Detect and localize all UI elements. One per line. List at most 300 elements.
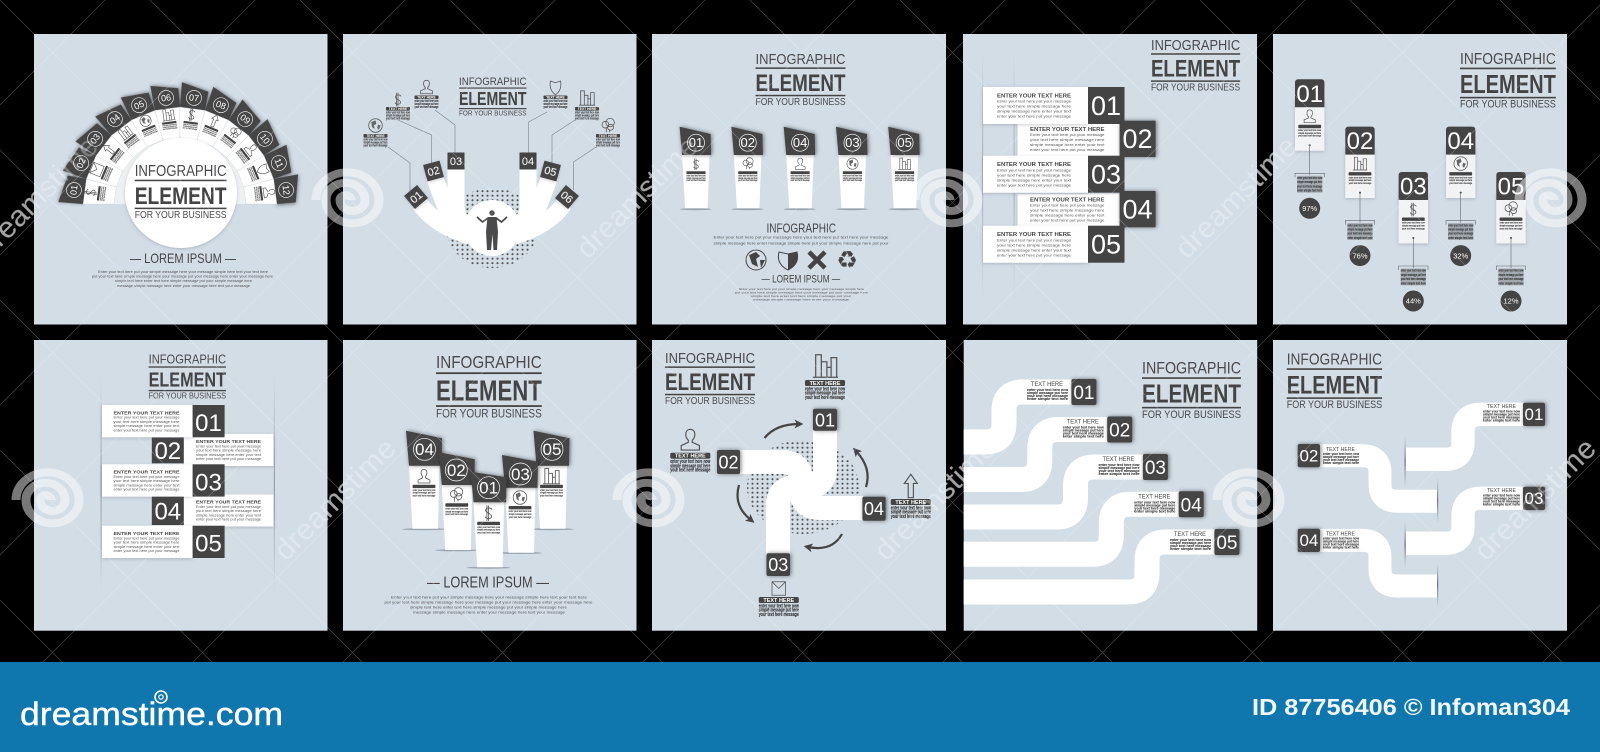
number box 03: 03 bbox=[450, 156, 462, 168]
fan segment 02: 02 bbox=[75, 157, 88, 170]
fan segment 07: your text here message bbox=[183, 126, 197, 131]
tab 04: 04 bbox=[154, 498, 181, 526]
tab 05: your text here simple message here bbox=[997, 242, 1072, 247]
cycle arrow top bbox=[764, 424, 799, 438]
icon block: tree: TEXT HERE bbox=[599, 134, 618, 138]
title bbox=[149, 351, 226, 401]
card 04: 32% bbox=[1453, 251, 1469, 260]
watermark text on the black ground: dreamstime bbox=[1169, 130, 1304, 265]
fan segment 03 bbox=[75, 120, 136, 175]
number box 03 bbox=[448, 152, 464, 170]
pillar 01: enter your text here now bbox=[477, 525, 500, 529]
title: INFOGRAPHIC bbox=[459, 76, 526, 88]
title: ELEMENT bbox=[756, 70, 846, 97]
ribbons bbox=[964, 376, 1244, 604]
title: FOR YOUR BUSINESS bbox=[1287, 399, 1382, 411]
block: chart: your text here message bbox=[805, 395, 845, 401]
pillar 01: your text here message bbox=[686, 178, 706, 182]
fan segment 05: your text here message bbox=[144, 130, 158, 138]
watermark text: dreamstime bbox=[868, 432, 1003, 567]
block: envelope: TEXT HERE bbox=[763, 598, 795, 604]
tab 01: enter your text here put your message bbox=[997, 114, 1072, 119]
tab 03: ENTER YOUR TEXT HERE bbox=[114, 470, 180, 476]
businessman bbox=[477, 210, 507, 250]
fan segment 01 bbox=[58, 175, 117, 209]
card 02: enter simple text here bbox=[1347, 236, 1373, 240]
icon block: shield: simple message put here bbox=[544, 102, 568, 106]
card 03: your text here message bbox=[1401, 277, 1426, 281]
tab 01: 01 bbox=[195, 410, 222, 437]
tab 05 bbox=[102, 526, 225, 558]
title: FOR YOUR BUSINESS bbox=[459, 109, 526, 118]
tab 03: enter your text here put your message bbox=[114, 487, 180, 492]
pillar 02 bbox=[435, 452, 479, 551]
card 02: simple message put here bbox=[1349, 178, 1372, 182]
fan segment 08: simple message put here bbox=[203, 128, 217, 136]
fan segment 10: simple message put here bbox=[236, 150, 247, 163]
ribbon 05: your text here message bbox=[1170, 544, 1211, 548]
card 01: enter your text here now bbox=[1297, 176, 1323, 180]
title: INFOGRAPHIC bbox=[149, 351, 226, 366]
fan segment 08: 08 bbox=[214, 99, 227, 112]
pillar 02 bbox=[731, 127, 763, 210]
ribbon 02: enter simple text here bbox=[1323, 461, 1359, 465]
pillar 04 bbox=[784, 127, 816, 210]
icon block: tree bbox=[596, 118, 620, 148]
title: FOR YOUR BUSINESS bbox=[1142, 409, 1241, 421]
ribbon 03: your text here message bbox=[1483, 500, 1520, 504]
pillar 02: your text here message bbox=[445, 512, 468, 516]
fan segment 05: 05 bbox=[133, 99, 146, 112]
body text: message simple message here enter your message here text your message bbox=[117, 283, 251, 288]
tab 04: enter your text here put your message bbox=[196, 517, 262, 522]
block: person: enter your text here now bbox=[670, 459, 711, 465]
tab 04: simple message here enter your text bbox=[196, 512, 262, 517]
body text bbox=[384, 594, 593, 614]
tab 05: your text here simple message here bbox=[114, 540, 180, 545]
fan segment 09: your text here message bbox=[220, 138, 233, 149]
ribbon 04: simple message put here bbox=[1323, 540, 1359, 544]
icon block: dollar bbox=[386, 93, 410, 120]
pillar 02: simple message put here bbox=[738, 176, 758, 180]
tab 02: Enter your text here put your message bbox=[1030, 132, 1105, 137]
card 01: your text here message bbox=[1298, 134, 1321, 138]
subheading: — LOREM IPSUM — bbox=[762, 274, 840, 286]
fan segment 01: simple message put here bbox=[100, 187, 105, 201]
panel 9: stepped ribbons bbox=[964, 340, 1258, 631]
block: person: your text here message bbox=[670, 468, 710, 474]
ribbon 04 bbox=[964, 488, 1208, 567]
icon block: person: your text here message bbox=[414, 105, 439, 109]
fan segment 06: simple message put here bbox=[163, 124, 177, 129]
pillar 03: 03 bbox=[845, 135, 860, 150]
block: arrow: TEXT HERE bbox=[895, 500, 927, 506]
ribbon 02: enter your text here now bbox=[1063, 426, 1104, 430]
ribbon 02: your text here message bbox=[1063, 432, 1104, 436]
ribbon 05 bbox=[964, 526, 1244, 604]
body text: Enter your text here put your simple message here your message simple here text your text here bbox=[391, 594, 588, 600]
ribbon 01 bbox=[964, 376, 1100, 454]
ribbon 03: simple message put here bbox=[1483, 496, 1520, 500]
tab 01: simple message here enter your text bbox=[997, 109, 1072, 114]
fan segment 04: enter your text here now bbox=[125, 135, 138, 146]
fan segment 07: simple message put here bbox=[183, 124, 197, 129]
pillar 04: your text here message bbox=[413, 494, 436, 498]
card 02 bbox=[1345, 127, 1375, 266]
body text: Enter your text here put your simple message here your message simple here bbox=[739, 287, 865, 291]
card 02: 02 bbox=[1347, 128, 1373, 155]
card 03: simple message put here bbox=[1402, 224, 1425, 228]
fan segment 10 bbox=[223, 119, 284, 175]
fan segment 05: simple message put here bbox=[143, 128, 157, 136]
tab 03: Enter your text here put your message bbox=[114, 474, 180, 479]
ribbon 02: TEXT HERE bbox=[1067, 420, 1099, 426]
icon block: shield: your text here message bbox=[544, 105, 568, 109]
title: INFOGRAPHIC bbox=[1287, 352, 1382, 369]
ribbon 02 bbox=[1298, 444, 1437, 501]
ribbon 03: TEXT HERE bbox=[1102, 457, 1134, 463]
pillar 01: simple message put here bbox=[477, 528, 500, 532]
tab 03: your text here simple message here bbox=[114, 478, 180, 483]
tab 05: enter your text here put your message bbox=[114, 548, 180, 553]
card 05: enter simple text here bbox=[1498, 281, 1524, 285]
panel 7: staggered pillars bbox=[343, 340, 636, 631]
pillar 05 bbox=[530, 431, 574, 530]
footer id and credit: ID 87756406 © Infoman304 bbox=[1252, 694, 1570, 720]
footer logo: dreamstime.com bbox=[20, 696, 283, 732]
fan segment 03: enter your text here now bbox=[111, 149, 123, 162]
tab 05: Enter your text here put your message bbox=[114, 535, 180, 540]
subheading: — LOREM IPSUM — bbox=[130, 250, 236, 266]
pillar 02: enter your text here now bbox=[445, 506, 469, 510]
title: ELEMENT bbox=[665, 369, 755, 396]
ribbon 01: your text here message bbox=[1483, 416, 1520, 420]
title: FOR YOUR BUSINESS bbox=[1151, 82, 1240, 93]
pillar 04: 04 bbox=[415, 440, 434, 459]
white centre oval bbox=[464, 200, 520, 256]
tab 05: 05 bbox=[1091, 230, 1121, 260]
fan segment 02: simple message put here bbox=[104, 167, 112, 181]
block: envelope bbox=[759, 582, 799, 618]
fan segment 03: 03 bbox=[88, 132, 102, 146]
title bbox=[1460, 51, 1556, 111]
panel 2: hand fingers with businessman bbox=[343, 34, 636, 324]
ribbon 04: 04 bbox=[1181, 495, 1202, 516]
tab 03: ENTER YOUR TEXT HERE bbox=[997, 162, 1071, 168]
ribbon 01: enter your text here now bbox=[1027, 388, 1069, 392]
title bbox=[756, 51, 846, 108]
pillar 03: enter your text here now bbox=[509, 509, 532, 513]
halftone dots bbox=[747, 440, 859, 534]
card 05: 12% bbox=[1503, 297, 1519, 306]
fan segment 12 bbox=[243, 174, 302, 209]
icon block: dollar: your text here message bbox=[386, 116, 410, 120]
title: ELEMENT bbox=[135, 183, 227, 210]
title: INFOGRAPHIC bbox=[1151, 38, 1240, 54]
icon block: chart: enter your text here now bbox=[575, 110, 599, 114]
icon block: shield: TEXT HERE bbox=[546, 95, 566, 99]
card 05: enter your text here now bbox=[1498, 269, 1524, 273]
tab 01: your text here simple message here bbox=[114, 419, 180, 424]
number box 01: 01 bbox=[408, 189, 425, 206]
pillar 04: enter your text here now bbox=[791, 173, 810, 177]
tab 03: simple message here enter your text bbox=[114, 482, 180, 487]
ribbon 03: enter simple text here bbox=[1483, 502, 1520, 506]
title: FOR YOUR BUSINESS bbox=[756, 97, 846, 108]
tab 02: your text here simple message here bbox=[196, 448, 262, 453]
number box 06 bbox=[555, 185, 579, 209]
ribbon 01: TEXT HERE bbox=[1031, 382, 1063, 388]
tab 02: simple message here enter your text bbox=[1030, 142, 1106, 147]
ribbon 01: TEXT HERE bbox=[1487, 404, 1516, 410]
fan segment 04: simple message put here bbox=[126, 137, 139, 148]
ribbon 03: enter your text here now bbox=[1098, 463, 1140, 467]
tab 03: Enter your text here put your message bbox=[997, 167, 1072, 172]
block: envelope: simple message put here bbox=[759, 608, 799, 614]
number box 05: 05 bbox=[543, 165, 558, 179]
halftone dots bbox=[446, 188, 538, 268]
tab 05: simple message here enter your text bbox=[997, 247, 1072, 252]
card 03: your text here message bbox=[1402, 226, 1425, 230]
ribbon 04: your text here message bbox=[1323, 543, 1359, 547]
fan segment 09: 09 bbox=[238, 112, 252, 126]
block: arrow: simple message put here bbox=[891, 510, 931, 516]
fan segment 06: 06 bbox=[160, 92, 172, 104]
fan segment 04: your text here message bbox=[127, 138, 140, 149]
icon block: globe: TEXT HERE bbox=[366, 134, 386, 138]
ribbon 01: enter simple text here bbox=[1027, 397, 1068, 401]
watermark text: dreamstime bbox=[1169, 130, 1304, 265]
ribbon 01: simple message put here bbox=[1483, 412, 1520, 416]
pillar 01: your text here message bbox=[477, 531, 500, 535]
fan segment 03: your text here message bbox=[114, 151, 125, 164]
ribbon 04: your text here message bbox=[1134, 506, 1176, 510]
card 05: simple message put here bbox=[1498, 273, 1524, 277]
watermark text on the black ground: dreamstime bbox=[868, 432, 1003, 567]
pillar 05: enter your text here now bbox=[540, 488, 563, 492]
watermark text bbox=[0, 130, 1600, 567]
ribbon 04: enter simple text here bbox=[1323, 546, 1359, 550]
body text: simple text here enter text here simple message put your simple message here bbox=[115, 278, 253, 283]
fan segment 02 bbox=[63, 145, 125, 192]
fan segment 10: enter your text here now bbox=[238, 149, 249, 162]
card 01: simple message put here bbox=[1298, 131, 1321, 135]
tab 03: 03 bbox=[1091, 160, 1121, 190]
tab 01: ENTER YOUR TEXT HERE bbox=[114, 410, 180, 416]
block: chart bbox=[805, 355, 846, 401]
ribbon 03: 03 bbox=[1145, 458, 1166, 479]
ribbon 03 bbox=[964, 451, 1172, 530]
tab 02: 02 bbox=[154, 438, 181, 465]
fan segment 12: your text here message bbox=[253, 187, 258, 201]
fan segment 06: enter your text here now bbox=[162, 123, 177, 128]
pillar 03 bbox=[498, 455, 542, 554]
card 01: 97% bbox=[1302, 204, 1318, 213]
title: FOR YOUR BUSINESS bbox=[149, 391, 226, 401]
card 01: your text here message bbox=[1297, 184, 1322, 188]
ribbon 04: enter simple text here bbox=[1134, 509, 1176, 513]
card 02: enter your text here now bbox=[1349, 175, 1372, 179]
tab 01: ENTER YOUR TEXT HERE bbox=[997, 94, 1071, 100]
card 05: your text here message bbox=[1500, 226, 1523, 230]
fan segment 01: your text here message bbox=[102, 187, 107, 201]
card 04: enter your text here now bbox=[1449, 175, 1473, 179]
pillar 01 bbox=[467, 472, 511, 569]
ribbon 04: enter your text here now bbox=[1134, 500, 1176, 504]
watermark text: dreamstime bbox=[268, 432, 403, 567]
pillar 03: your text here message bbox=[509, 515, 532, 519]
ribbon 02: simple message put here bbox=[1323, 455, 1359, 459]
fan pale ring bbox=[114, 138, 246, 204]
box 03: 03 bbox=[768, 555, 788, 575]
fan segment 10: your text here message bbox=[235, 151, 246, 164]
card 03 bbox=[1399, 172, 1428, 312]
pillar 04: enter your text here now bbox=[413, 488, 436, 492]
panel 5: percentage cards bbox=[1273, 34, 1567, 324]
title bbox=[1287, 352, 1382, 411]
card 04: simple message put here bbox=[1448, 227, 1473, 231]
pinwheel arms bbox=[740, 430, 863, 555]
card 02: your text here message bbox=[1347, 232, 1373, 236]
tab 04: simple message here enter your text bbox=[1030, 212, 1106, 217]
ribbon 04: TEXT HERE bbox=[1138, 494, 1170, 500]
fan segment 01: 01 bbox=[68, 184, 80, 196]
title bbox=[665, 350, 755, 407]
pillar 01: 01 bbox=[689, 135, 703, 150]
pillar 05 bbox=[888, 127, 920, 210]
tab 05 bbox=[983, 226, 1124, 263]
block: person bbox=[670, 429, 711, 474]
ribbon 03: simple message put here bbox=[1098, 466, 1140, 470]
pillar 05: your text here message bbox=[540, 494, 563, 498]
icon block: globe bbox=[364, 119, 388, 148]
tab 02: simple message here enter your text bbox=[196, 452, 262, 457]
ribbon 02: TEXT HERE bbox=[1326, 447, 1355, 453]
pillar 05: 05 bbox=[543, 440, 561, 459]
tab 05: 05 bbox=[195, 531, 222, 558]
ribbon 01: simple message put here bbox=[1027, 391, 1068, 395]
watermark text on the black ground: dreamstime bbox=[1468, 432, 1600, 567]
card 03: simple message put here bbox=[1401, 273, 1426, 277]
ribbon 03: TEXT HERE bbox=[1487, 488, 1516, 494]
tab 02: ENTER YOUR TEXT HERE bbox=[196, 439, 262, 445]
lower text: simple message here enter message simple here put your simple message here put your bbox=[714, 240, 889, 246]
body text: message simple message here enter your message here text your message bbox=[413, 610, 566, 614]
panel 10: S-curved ribbons bbox=[1273, 340, 1567, 631]
number box 02: 02 bbox=[426, 165, 441, 179]
tab 05: ENTER YOUR TEXT HERE bbox=[114, 531, 180, 537]
ribbon 03: 03 bbox=[1525, 489, 1543, 508]
ribbon 02: enter simple text here bbox=[1063, 434, 1104, 438]
card 03: 03 bbox=[1400, 174, 1427, 200]
tab 02: 02 bbox=[1122, 124, 1153, 154]
tab 03: 03 bbox=[195, 469, 222, 496]
ribbon 02: your text here message bbox=[1323, 458, 1359, 462]
card 01: enter your text here now bbox=[1298, 128, 1322, 132]
tab 01: Enter your text here put your message bbox=[997, 99, 1072, 104]
title: FOR YOUR BUSINESS bbox=[665, 396, 755, 407]
fan segment 12: enter your text here now bbox=[256, 186, 261, 201]
tab 02: enter your text here put your message bbox=[196, 456, 262, 461]
block: chart: TEXT HERE bbox=[810, 381, 841, 387]
title: ELEMENT bbox=[1142, 379, 1241, 409]
pillar 04: simple message put here bbox=[791, 176, 810, 180]
icon block: dollar: TEXT HERE bbox=[389, 107, 408, 111]
tab 04 bbox=[1018, 191, 1156, 227]
box 04: 04 bbox=[864, 499, 884, 519]
title: ELEMENT bbox=[459, 89, 526, 109]
tab 01 bbox=[983, 87, 1124, 124]
pillar 01: simple message put here bbox=[686, 176, 706, 180]
pillar 05: your text here message bbox=[895, 178, 915, 182]
tab 04: 04 bbox=[1122, 194, 1153, 224]
title bbox=[1142, 360, 1241, 421]
pillar 01: enter your text here now bbox=[686, 173, 706, 177]
panel 6: interlocking tabs bbox=[34, 340, 328, 631]
card 04 bbox=[1446, 127, 1475, 266]
cycle arrow bottom bbox=[808, 534, 842, 548]
cycle arrow left bbox=[738, 485, 751, 520]
fan segment 09: simple message put here bbox=[221, 137, 234, 148]
fan segment 05: enter your text here now bbox=[142, 126, 157, 135]
fan segment 01: enter your text here now bbox=[99, 186, 104, 201]
tab 01: simple message here enter your text bbox=[114, 423, 180, 428]
fan segment 04 bbox=[95, 100, 151, 161]
title: ELEMENT bbox=[1460, 71, 1556, 99]
ribbon 04: enter your text here now bbox=[1323, 537, 1359, 541]
tab 04: ENTER YOUR TEXT HERE bbox=[1030, 197, 1105, 203]
pillar 05: enter your text here now bbox=[895, 173, 914, 177]
card 03: enter your text here now bbox=[1402, 221, 1425, 225]
fan segment 11: simple message put here bbox=[248, 167, 256, 181]
title: ELEMENT bbox=[1151, 56, 1240, 83]
tab 01: Enter your text here put your message bbox=[114, 415, 180, 420]
fan segment 10: 10 bbox=[258, 132, 272, 146]
lower heading: INFOGRAPHIC bbox=[766, 221, 836, 236]
tab 02: Enter your text here put your message bbox=[196, 444, 262, 448]
ribbon 01: enter your text here now bbox=[1483, 410, 1521, 414]
ribbon 01: 01 bbox=[1073, 383, 1094, 404]
pillar 02: your text here message bbox=[738, 178, 758, 182]
fan segment 11: 11 bbox=[272, 157, 285, 169]
fan segment 11 bbox=[235, 145, 297, 191]
body text bbox=[735, 287, 869, 302]
body text: simple text here enter text here simple message put your bbox=[751, 294, 851, 298]
icon block: person: enter your text here now bbox=[414, 99, 439, 103]
tab 01: your text here simple message here bbox=[997, 104, 1072, 109]
watermark text: dreamstime bbox=[1468, 432, 1600, 567]
block: person: TEXT HERE bbox=[675, 454, 706, 460]
pillar 03: enter your text here now bbox=[843, 173, 862, 177]
number box 06: 06 bbox=[558, 189, 575, 206]
card 04: simple message put here bbox=[1449, 178, 1472, 182]
body text: Enter your text here put your simple message here your message simple here text your text here bbox=[98, 269, 269, 274]
ribbon 01: enter simple text here bbox=[1483, 418, 1520, 422]
watermark text on the black ground: dreamstime bbox=[268, 432, 403, 567]
ribbon 05: enter simple text here bbox=[1170, 547, 1211, 551]
icon: cross bbox=[809, 252, 825, 268]
icon block: chart: simple message put here bbox=[575, 114, 599, 118]
panel 1: semicircular fan bbox=[34, 34, 328, 324]
pillar 04: 04 bbox=[793, 135, 807, 150]
watermark text on the black ground: dreamstime bbox=[570, 130, 705, 265]
card 05: 05 bbox=[1498, 174, 1524, 200]
fan segment 02: enter your text here now bbox=[102, 166, 111, 181]
icon block: shield: enter your text here now bbox=[544, 99, 568, 103]
icon block: chart bbox=[575, 91, 599, 120]
panel 3: five pillars bbox=[652, 34, 946, 324]
card 04: enter simple text here bbox=[1448, 236, 1473, 240]
